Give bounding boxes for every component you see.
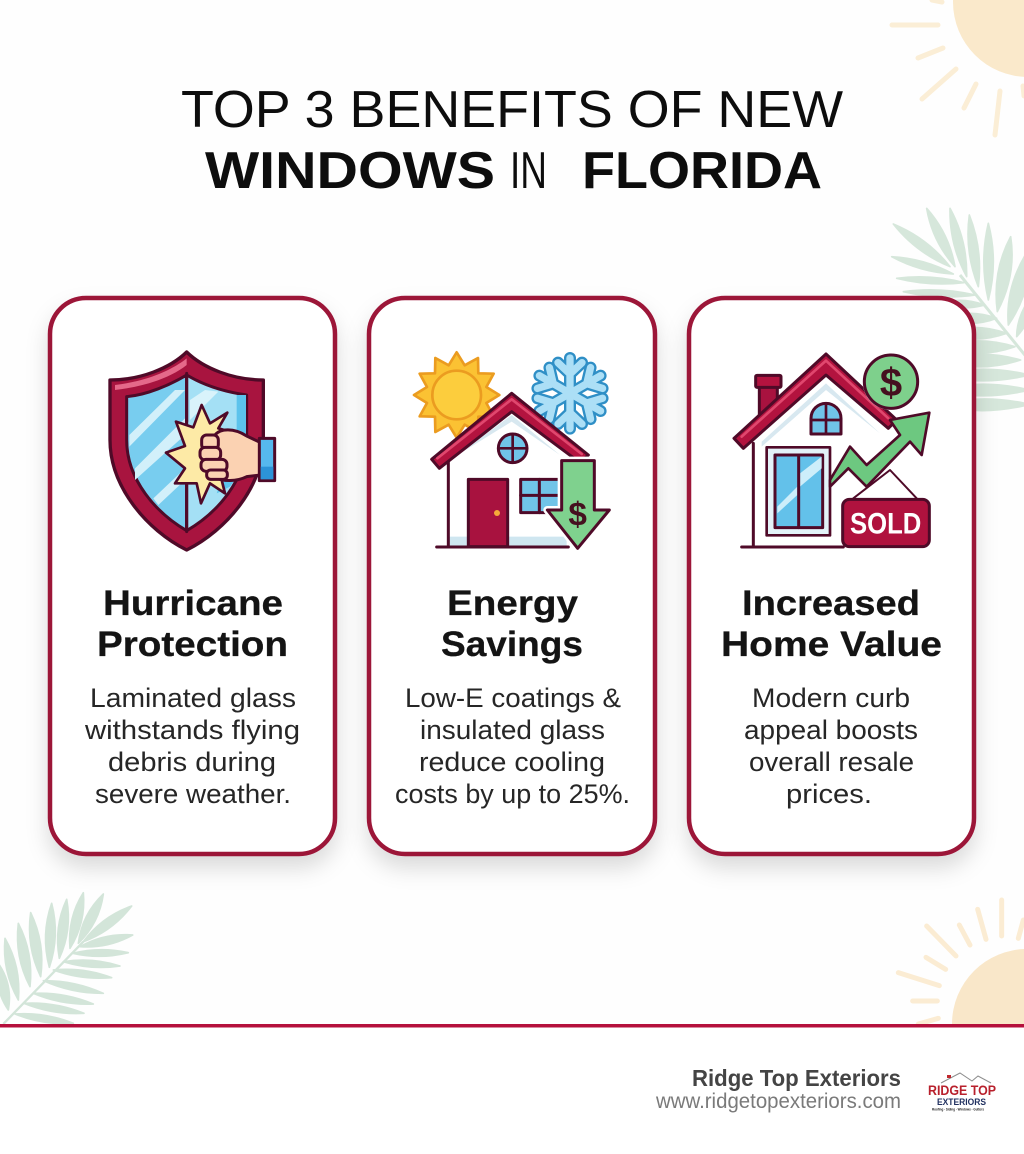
icon: house with rising arrow and sold sign bbox=[734, 353, 929, 547]
body text bbox=[395, 683, 630, 809]
body text: Laminated glass bbox=[90, 683, 296, 713]
heading: Energy bbox=[447, 584, 579, 623]
decorative sun top right bbox=[892, 0, 1024, 135]
body text: severe weather. bbox=[95, 779, 291, 809]
title bbox=[181, 81, 843, 200]
decorative sun bottom right bbox=[896, 898, 1024, 1024]
body text bbox=[744, 683, 918, 809]
body text: withstands flying bbox=[84, 715, 300, 745]
heading bbox=[721, 584, 942, 664]
panel: energy savings bbox=[369, 298, 655, 854]
body text: costs by up to 25%. bbox=[395, 779, 630, 809]
footer brand text bbox=[655, 1065, 901, 1113]
body text: overall resale bbox=[749, 747, 914, 777]
body text: Modern curb bbox=[752, 683, 910, 713]
body text: insulated glass bbox=[420, 715, 605, 745]
icon: shield with fist bbox=[110, 352, 275, 550]
title: FLORIDA bbox=[582, 142, 822, 200]
icon: sun bbox=[414, 352, 499, 438]
logo: Ridge Top Exteriors: Roofing · Siding · Windows · Gutters bbox=[932, 1106, 985, 1112]
footer brand text: Ridge Top Exteriors bbox=[692, 1065, 901, 1091]
panel: increased home value bbox=[689, 298, 974, 854]
heading: Increased bbox=[742, 584, 920, 623]
body text bbox=[84, 683, 300, 809]
logo: Ridge Top Exteriors: EXTERIORS bbox=[937, 1097, 986, 1107]
footer band bbox=[0, 1024, 1024, 1154]
footer brand text: www.ridgetopexteriors.com bbox=[655, 1090, 901, 1113]
heading: Protection bbox=[97, 625, 288, 664]
icon: snowflake bbox=[533, 358, 607, 429]
icon: house with sun, snowflake and savings arrow bbox=[414, 352, 609, 548]
heading bbox=[441, 584, 583, 664]
heading: Hurricane bbox=[103, 584, 283, 623]
heading: Savings bbox=[441, 625, 583, 664]
body text: appeal boosts bbox=[744, 715, 918, 745]
title: TOP 3 BENEFITS OF NEW bbox=[181, 81, 843, 139]
title: IN bbox=[510, 142, 547, 200]
logo: Ridge Top Exteriors: RIDGE TOP bbox=[928, 1083, 996, 1098]
body text: Low-E coatings & bbox=[405, 683, 621, 713]
body text: prices. bbox=[786, 779, 872, 809]
body text: debris during bbox=[108, 747, 276, 777]
title: WINDOWS bbox=[205, 142, 495, 200]
icon: house with rising arrow and sold sign: $ bbox=[880, 361, 902, 405]
icon: house with rising arrow and sold sign: SOLD bbox=[850, 508, 921, 541]
heading: Home Value bbox=[721, 625, 942, 664]
panel: hurricane protection bbox=[50, 298, 335, 854]
decorative palm bottom left bbox=[0, 893, 133, 1024]
icon: house with sun, snowflake and savings arrow: $ bbox=[568, 496, 587, 533]
body text: reduce cooling bbox=[419, 747, 605, 777]
logo: Ridge Top Exteriors bbox=[928, 1073, 996, 1112]
heading bbox=[97, 584, 288, 664]
decorative palm top right bbox=[892, 208, 1024, 411]
